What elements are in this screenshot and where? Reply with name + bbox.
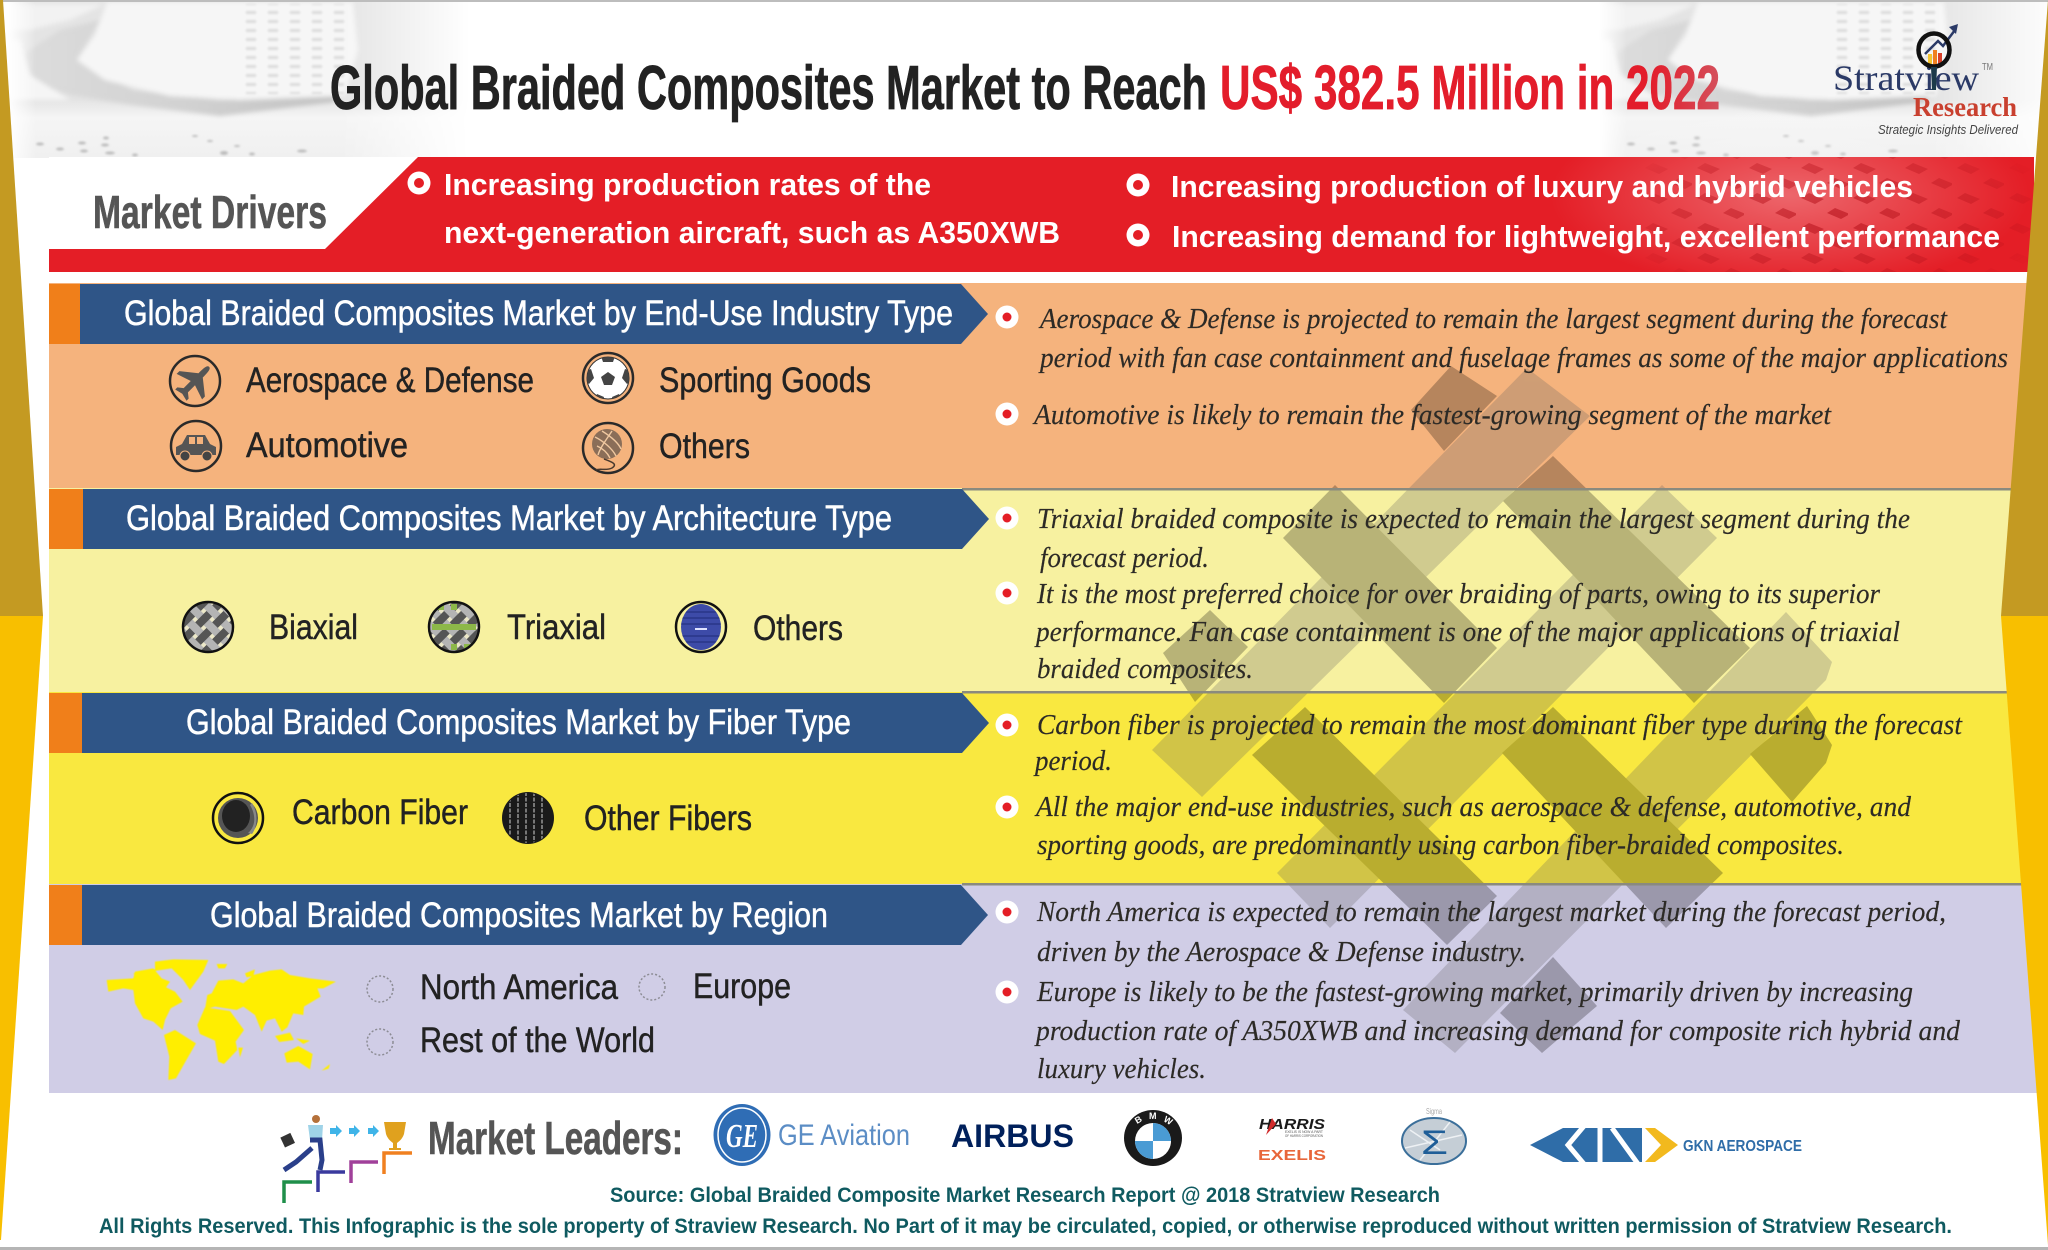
logo: Stratview Research xyxy=(1833,24,2019,137)
label: automotive: Automotive xyxy=(246,426,408,465)
logo: Harris Exelis: OF HARRIS CORPORATION xyxy=(1285,1133,1323,1138)
text: carbon fiber commentary xyxy=(1033,709,1963,777)
label: others: Others xyxy=(659,427,750,466)
text: europe commentary: luxury vehicles. xyxy=(1037,1053,1206,1085)
bullet xyxy=(996,714,1018,736)
logo: Harris Exelis: EXELIS xyxy=(1258,1147,1326,1164)
text: europe commentary xyxy=(1034,976,1960,1085)
text: preferred choice commentary: performance. Fan case containment is one of the major applications of triaxial xyxy=(1034,616,1900,648)
icon: climber on stairs xyxy=(280,1115,412,1203)
label: biaxial: Biaxial xyxy=(269,608,358,647)
marker: rest of world xyxy=(367,1029,393,1055)
icon: airplane xyxy=(168,354,222,408)
driver bullet 2 xyxy=(1126,174,1150,196)
marker: north america xyxy=(367,976,393,1002)
text: automotive commentary: Automotive is likely to remain the fastest-growing segment of the market xyxy=(1032,399,1832,431)
header: end-use industry xyxy=(49,284,988,344)
frame bottom line xyxy=(0,1247,2048,1250)
logo: Harris Exelis: EXELIS IS NOW A PART xyxy=(1285,1129,1323,1134)
panel backgrounds xyxy=(49,283,2039,1093)
bullet xyxy=(996,796,1018,818)
icon: other fibers xyxy=(502,792,554,844)
text: north america commentary: North America is expected to remain the largest market during the forecast period, xyxy=(1036,896,1946,928)
text: preferred choice commentary: braided composites. xyxy=(1037,653,1253,685)
text: preferred choice commentary xyxy=(1034,578,1900,685)
title: Global Braided Composites Market to Reach xyxy=(330,54,1207,123)
text: end-use commentary: All the major end-use industries, such as aerospace & defense, automotive, and xyxy=(1034,791,1911,823)
header: end-use industry: Global Braided Composites Market by End-Use Industry Type xyxy=(124,294,953,333)
driver text: aircraft: Increasing production rates of the xyxy=(444,167,931,202)
bullet xyxy=(996,506,1018,530)
icon: car xyxy=(171,421,221,471)
text: preferred choice commentary: It is the most preferred choice for over braiding of parts, owing to its superior xyxy=(1036,578,1881,610)
panel: end-use industry xyxy=(49,284,2008,473)
driver bullet 3 xyxy=(1126,224,1150,246)
label: triaxial: Triaxial xyxy=(507,608,606,647)
bullet xyxy=(996,306,1018,328)
logo: Stratview Research: Strategic Insights Delivered xyxy=(1878,122,2019,137)
driver text: lightweight: Increasing demand for lightweight, excellent performance xyxy=(1172,219,2000,254)
logo: Stratview Research: TM xyxy=(1982,62,1993,73)
panel: fiber xyxy=(49,693,1963,861)
label: sporting goods: Sporting Goods xyxy=(659,361,871,400)
icon: football xyxy=(583,353,633,403)
section separators xyxy=(962,488,2048,886)
text: carbon fiber commentary: Carbon fiber is projected to remain the most dominant fiber type during the forecast xyxy=(1037,709,1963,741)
logo: GKN xyxy=(1530,1126,1678,1164)
header: region: Global Braided Composites Market by Region xyxy=(210,896,828,935)
driver text: aircraft xyxy=(444,167,1060,250)
logo: BMW: M xyxy=(1149,1111,1156,1121)
label: aerospace and defense: Aerospace & Defense xyxy=(246,361,534,400)
header: architecture xyxy=(49,489,989,549)
icon: magnifier chart xyxy=(1918,24,1958,90)
text: aerospace commentary xyxy=(1038,303,2008,374)
market leaders heading: Market Leaders: xyxy=(428,1112,683,1164)
panel: architecture xyxy=(49,489,1910,685)
text: europe commentary: production rate of A350XWB and increasing demand for composite rich hybrid and xyxy=(1034,1015,1960,1047)
logo: Harris Exelis xyxy=(1258,1116,1326,1164)
logo: GE xyxy=(714,1104,770,1166)
background texture: braided image right xyxy=(1591,2,2048,158)
icon: carbon fiber xyxy=(213,793,263,843)
label: other fibers: Other Fibers xyxy=(584,799,752,838)
marker: europe xyxy=(639,974,665,1000)
world map xyxy=(107,959,336,1080)
left side wedge xyxy=(0,0,43,1240)
text: GKN Aerospace: GKN AEROSPACE xyxy=(1683,1138,1802,1155)
title: US$ 382.5 Million in 2022 xyxy=(1220,54,1720,123)
icon: blue braided cylinder xyxy=(676,602,726,652)
text: triaxial commentary: Triaxial braided composite is expected to remain the largest segment during the xyxy=(1037,503,1910,535)
text: europe commentary: Europe is likely to be the fastest-growing market, primarily driven by increasing xyxy=(1036,976,1913,1008)
logo: Sigma: Σ xyxy=(1421,1124,1448,1162)
text: triaxial commentary: forecast period. xyxy=(1040,542,1209,574)
label: carbon fiber: Carbon Fiber xyxy=(292,793,468,832)
bullet xyxy=(996,980,1018,1004)
footer: market leaders xyxy=(280,1104,1802,1203)
logo: Sigma: Sigma xyxy=(1426,1107,1442,1116)
bullet xyxy=(996,582,1018,604)
logo: Harris Exelis: HARRIS xyxy=(1259,1116,1325,1133)
driver text: aircraft: next-generation aircraft, such as A350XWB xyxy=(444,215,1060,250)
header: fiber: Global Braided Composites Market by Fiber Type xyxy=(186,703,851,742)
logo: Stratview Research: Research xyxy=(1913,92,2017,122)
label: rest of the world: Rest of the World xyxy=(420,1021,655,1060)
header: fiber xyxy=(49,693,989,753)
driver text: luxury vehicles: Increasing production of luxury and hybrid vehicles xyxy=(1171,169,1913,204)
logo: GE: GE xyxy=(726,1118,758,1155)
bullet xyxy=(996,402,1018,426)
watermark: braid pattern xyxy=(1152,366,1832,1053)
label: north america: North America xyxy=(420,968,618,1007)
text: north america commentary: driven by the Aerospace & Defense industry. xyxy=(1037,936,1526,968)
text: end-use commentary: sporting goods, are predominantly using carbon fiber-braided composites. xyxy=(1037,829,1844,861)
label: others: Others xyxy=(753,609,843,648)
icon: yarn ball xyxy=(583,423,633,473)
copyright line: All Rights Reserved. This Infographic is the sole property of Straview Research. No Part of it may be circulated, copied, or otherwise reproduced without written permission of Stratview Research. xyxy=(99,1215,1952,1238)
text: north america commentary xyxy=(1036,896,1946,968)
panel: market drivers xyxy=(49,152,2034,272)
source line: Source: Global Braided Composite Market Research Report @ 2018 Stratview Research xyxy=(610,1184,1440,1207)
market drivers label: Market Drivers xyxy=(93,186,327,238)
icon: triaxial weave xyxy=(429,602,479,652)
logo: BMW xyxy=(1124,1110,1182,1166)
label: europe: Europe xyxy=(693,967,791,1006)
text: end-use commentary xyxy=(1034,791,1911,861)
frame top line xyxy=(0,0,2048,2)
text: carbon fiber commentary: period. xyxy=(1033,745,1112,777)
background texture: braided image left xyxy=(0,2,480,158)
header: architecture: Global Braided Composites Market by Architecture Type xyxy=(126,499,892,538)
text: GE Aviation: GE Aviation xyxy=(778,1119,910,1152)
icon: biaxial weave xyxy=(183,602,233,652)
logo: BMW: W xyxy=(1162,1114,1175,1127)
text: triaxial commentary xyxy=(1037,503,1910,574)
text: aerospace commentary: Aerospace & Defense is projected to remain the largest segment during the forecast xyxy=(1038,303,1948,335)
driver bullet 1 xyxy=(408,172,430,194)
logo: Stratview Research: Stratview xyxy=(1833,58,1979,98)
panel: region xyxy=(49,885,1960,1085)
logo: BMW: B xyxy=(1133,1114,1144,1126)
bullet xyxy=(996,900,1018,924)
text: aerospace commentary: period with fan case containment and fuselage frames as some of the major applications xyxy=(1038,342,2008,374)
right side wedge xyxy=(2001,0,2048,1245)
header: region xyxy=(49,885,988,945)
logo: Airbus: AIRBUS xyxy=(951,1118,1074,1154)
logo: Sigma xyxy=(1402,1107,1466,1164)
